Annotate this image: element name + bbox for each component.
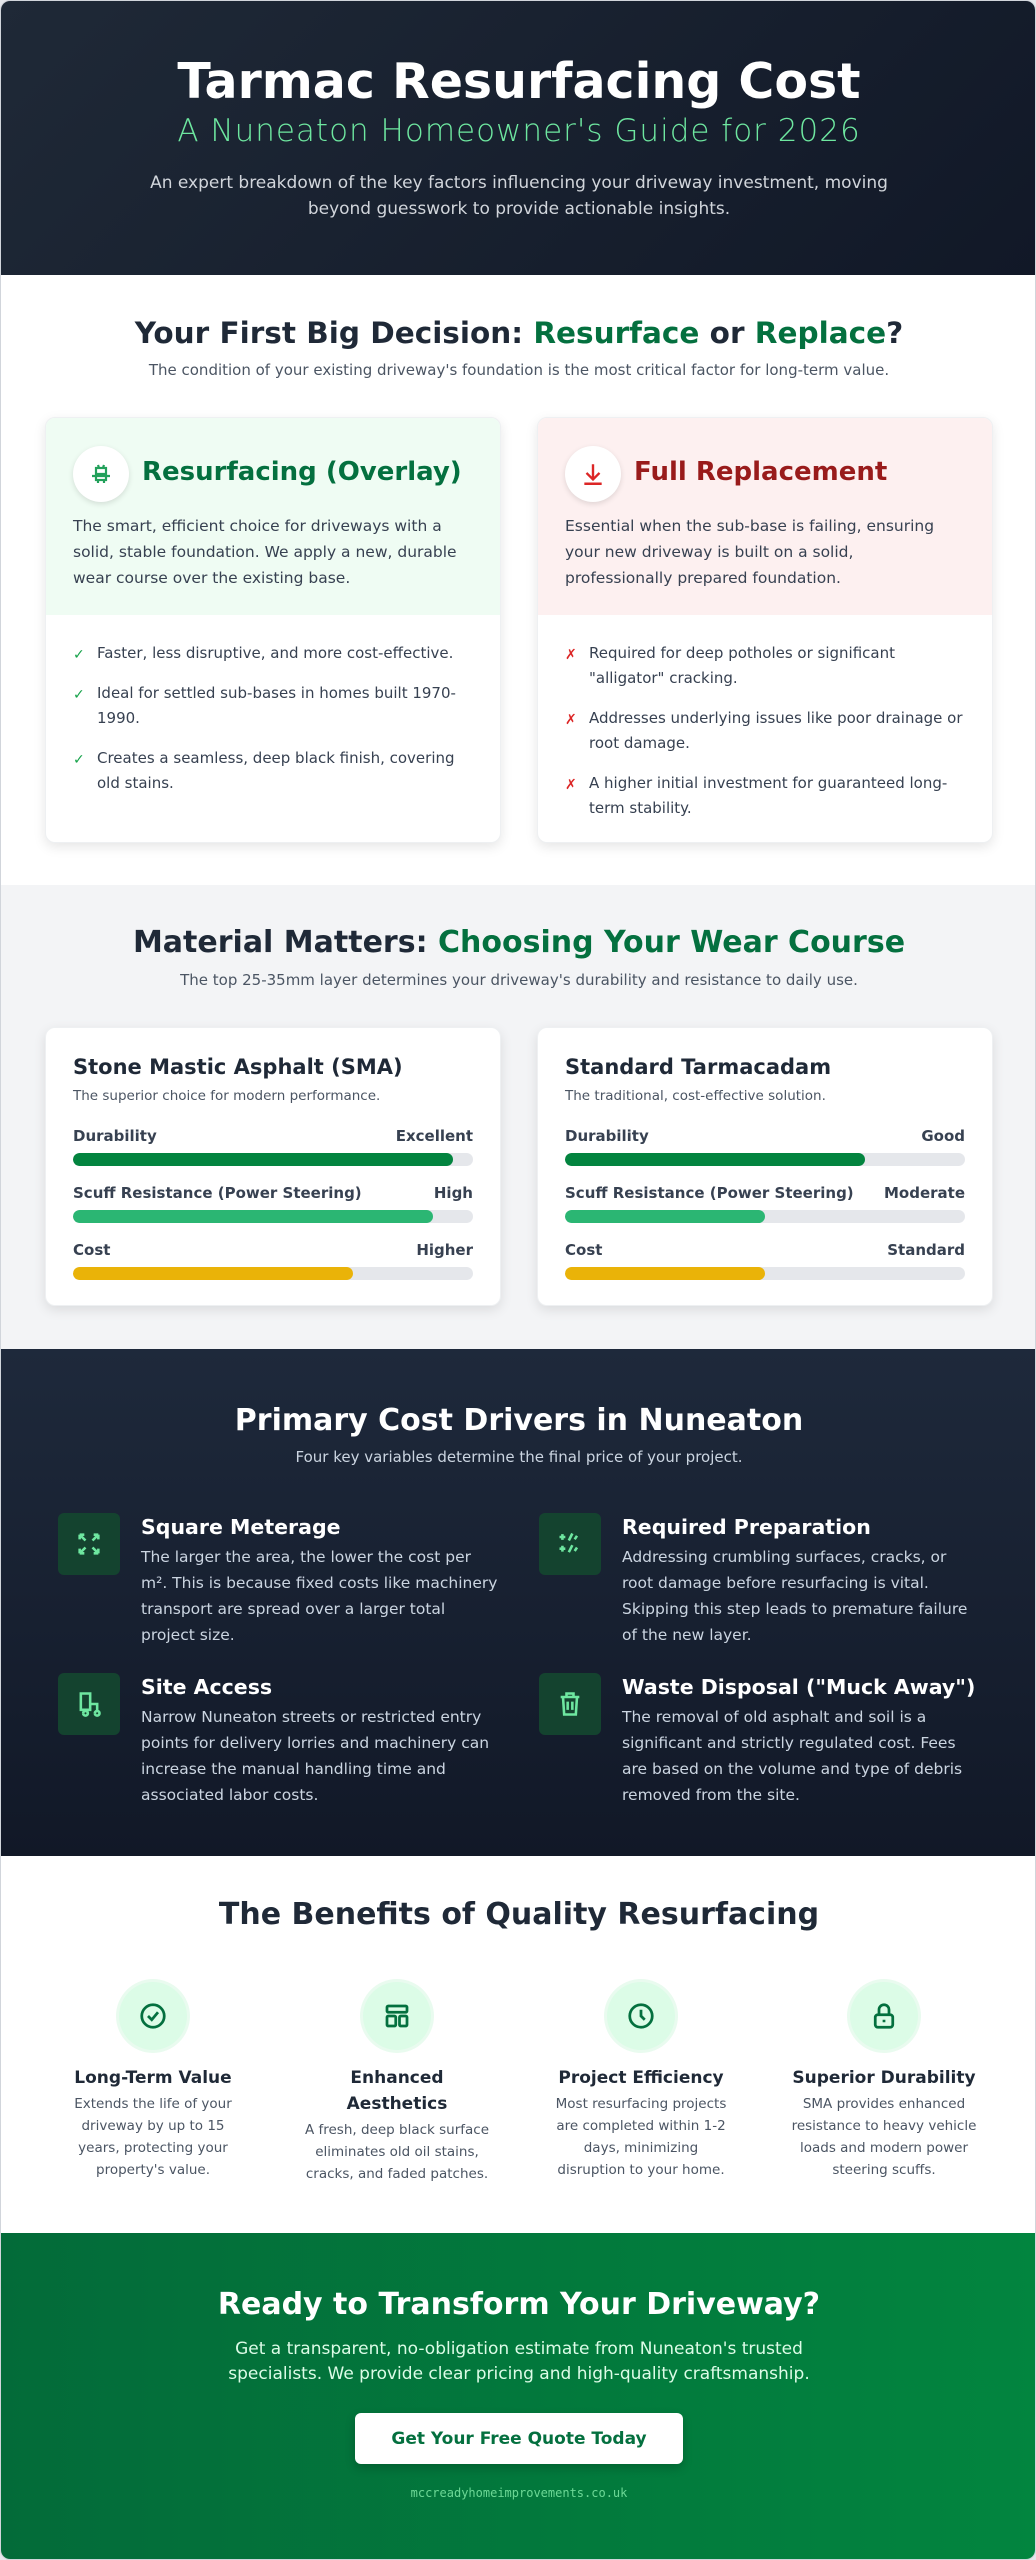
icon: clock [607,1982,675,2050]
bar: cost: Higher [416,1241,473,1259]
bar: cost [73,1241,473,1280]
bar: durability: Durability [565,1127,649,1145]
subheading: The condition of your existing driveway's foundation is the most critical factor for long-term value. [149,361,889,379]
list: cons: Required for deep potholes or significant "alligator" cracking. [589,644,895,687]
benefit: durability: Superior Durability [792,2068,976,2088]
driver: preparation [539,1513,967,1644]
list: pros [73,644,456,792]
driver: waste disposal [539,1673,975,1804]
bar: durability [73,1127,473,1166]
bar: cost: Cost [565,1241,602,1259]
section: materials [1,885,1036,1349]
driver: site access: Site Access [141,1675,272,1699]
cta heading: Ready to Transform Your Driveway? [218,2287,820,2322]
subheading: Four key variables determine the final price of your project. [296,1448,742,1466]
bar: cost: Standard [887,1241,965,1259]
panel: tarmacadam [537,1027,993,1306]
panel: SMA [45,1027,501,1306]
section: call to action [1,2233,1036,2560]
heading: Material Matters: Choosing Your Wear Course [133,925,905,960]
bar: scuff [565,1184,965,1223]
list: cons: A higher initial investment for guaranteed long-term stability. [589,774,947,817]
icon: sparkles [539,1513,601,1575]
heading: The Benefits of Quality Resurfacing [219,1897,819,1932]
icon: layout [363,1982,431,2050]
list: pros: Faster, less disruptive, and more cost-effective. [97,644,453,662]
section: cost drivers [1,1349,1036,1856]
bar: durability: Durability [73,1127,157,1145]
bar: scuff: High [434,1184,473,1202]
panel: SMA: The superior choice for modern performance. [73,1088,380,1104]
icon: expand [58,1513,120,1575]
list: pros: ✓ [73,647,85,663]
intro text: An expert breakdown of the key factors influencing your driveway investment, moving beyond guesswork to provide actionable insights. [150,173,888,219]
heading: Primary Cost Drivers in Nuneaton [235,1403,803,1438]
section: resurface or replace [1,275,1036,885]
icon: truck [58,1673,120,1735]
driver: waste disposal: Waste Disposal ("Muck Away") [622,1675,975,1699]
list: pros: ✓ [73,687,85,703]
driver: site access: Narrow Nuneaton streets or restricted entry points for delivery lorries and machinery can increase the manual handling time and associated labor costs. [141,1708,489,1804]
bar: durability: Excellent [396,1127,473,1145]
benefit: durability [792,1979,976,2178]
website url: mccreadyhomeimprovements.co.uk [411,2486,627,2500]
benefit: efficiency: Project Efficiency [558,2068,724,2088]
benefit: efficiency [556,1979,726,2178]
bar: cost [565,1241,965,1280]
panel: tarmacadam: Standard Tarmacadam [565,1055,831,1079]
panel: replacement [537,417,993,843]
cta text: Get a transparent, no-obligation estimate from Nuneaton's trusted specialists. We provide clear pricing and high-quality craftsmanship. [228,2339,810,2384]
bar: scuff [73,1184,473,1223]
heading: Your First Big Decision: Resurface or Replace? [135,316,903,350]
benefit: long-term value [74,1979,232,2178]
driver: waste disposal: The removal of old asphalt and soil is a significant and strictly regulated cost. Fees are based on the volume and type of debris removed from the site. [622,1708,962,1804]
benefit: aesthetics: A fresh, deep black surface eliminates old oil stains, cracks, and faded patches. [305,2122,489,2182]
driver: square meterage: The larger the area, the lower the cost per m². This is because fixed costs like machinery transport are spread over a larger total project size. [141,1548,497,1644]
benefit: long-term value: Extends the life of your driveway by up to 15 years, protecting your property's value. [74,2096,232,2178]
benefit: durability: SMA provides enhanced resistance to heavy vehicle loads and modern power steering scuffs. [792,2096,976,2178]
bar: durability: Good [921,1127,965,1145]
driver: square meterage: Square Meterage [141,1515,341,1539]
list: cons: Addresses underlying issues like poor drainage or root damage. [589,709,963,752]
benefit: long-term value: Long-Term Value [74,2068,232,2088]
subtitle: A Nuneaton Homeowner's Guide for 2026 [177,113,861,149]
cta button [355,2413,683,2464]
benefit: aesthetics [305,1979,489,2182]
panel: resurfacing [45,417,501,843]
icon: down arrow [565,446,621,502]
list: cons: ✗ [565,777,577,793]
bar: scuff: Moderate [884,1184,965,1202]
section: benefits [1,1856,1036,2233]
driver: site access [58,1673,489,1804]
driver: square meterage [58,1513,497,1644]
list: pros: ✓ [73,752,85,768]
cta button: Get Your Free Quote Today [391,2428,647,2448]
bar: scuff: Scuff Resistance (Power Steering) [73,1184,362,1202]
icon: lock [850,1982,918,2050]
card description: The smart, efficient choice for driveways with a solid, stable foundation. We apply a new, durable wear course over the existing base. [73,517,457,587]
icon: roller [73,446,129,502]
list: cons [565,644,963,817]
list: pros: Creates a seamless, deep black finish, covering old stains. [97,749,455,792]
card description: Essential when the sub-base is failing, ensuring your new driveway is built on a solid, professionally prepared foundation. [565,517,934,587]
benefit: efficiency: Most resurfacing projects are completed within 1-2 days, minimizing disruption to your home. [556,2096,726,2178]
benefit: aesthetics: Aesthetics [347,2094,447,2114]
header [1,1,1036,275]
panel: tarmacadam: The traditional, cost-effective solution. [565,1088,826,1104]
bar: scuff: Scuff Resistance (Power Steering) [565,1184,854,1202]
list: cons: ✗ [565,647,577,663]
benefit: aesthetics: Enhanced [350,2068,444,2088]
driver: preparation: Required Preparation [622,1515,871,1539]
bar: cost: Cost [73,1241,110,1259]
list: pros: Ideal for settled sub-bases in homes built 1970-1990. [97,684,456,727]
icon: check circle [119,1982,187,2050]
panel: SMA: Stone Mastic Asphalt (SMA) [73,1055,403,1079]
subheading: The top 25-35mm layer determines your driveway's durability and resistance to daily use. [180,971,858,989]
card title: Full Replacement [634,457,887,487]
card title: Resurfacing (Overlay) [142,457,462,487]
title: Tarmac Resurfacing Cost [177,53,861,110]
driver: preparation: Addressing crumbling surfaces, cracks, or root damage before resurfacing is vital. Skipping this step leads to premature failure of the new layer. [622,1548,967,1644]
icon: trash [539,1673,601,1735]
bar: durability [565,1127,965,1166]
list: cons: ✗ [565,712,577,728]
